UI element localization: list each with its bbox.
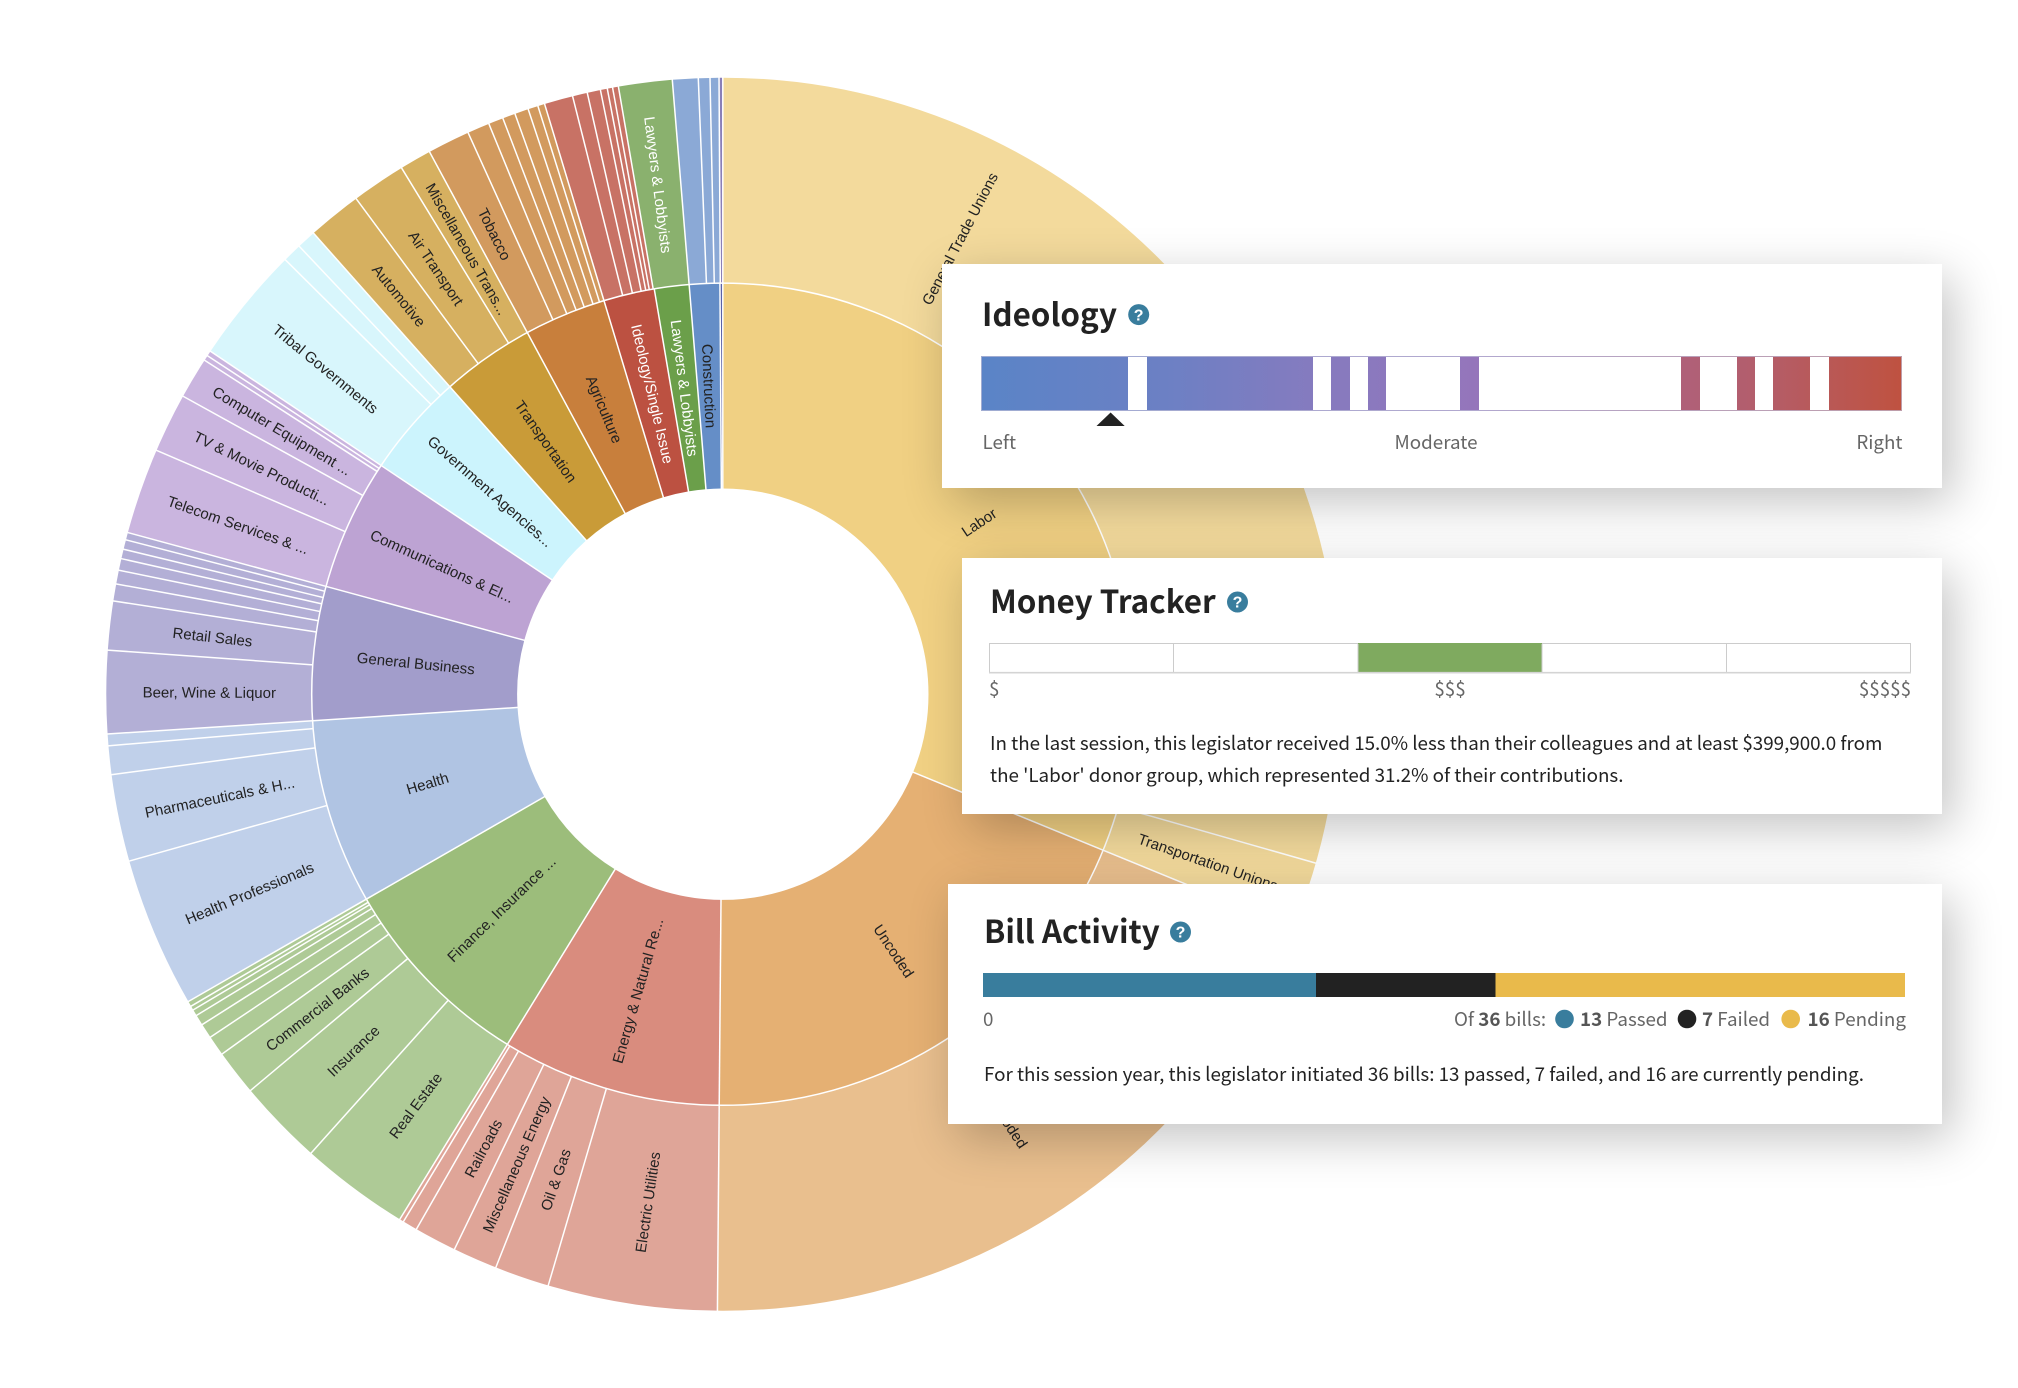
- label: Automotive: Automotive: [368, 262, 429, 331]
- label: Uncoded outer: Uncoded: [983, 1092, 1030, 1152]
- inner ring: donor sectors: [287, 259, 1158, 1130]
- label: Real Estate: Real Estate: [386, 1070, 446, 1142]
- label: Tobacco: Tobacco: [474, 206, 514, 263]
- label: Telecom Services: Telecom Services & ...: [165, 493, 311, 558]
- scale label: five dollars: $$$$$: [1859, 675, 1911, 702]
- label: Miscellaneous Energy: Miscellaneous Energy: [480, 1094, 555, 1235]
- money tracker scale: [989, 643, 1911, 673]
- outer ring labels: [143, 116, 1280, 1254]
- legend: bill counts: [1454, 1005, 1906, 1032]
- label: Railroads: Railroads: [462, 1117, 506, 1181]
- text block: money summary: In the last session, this legislator received 15.0% less than their colleagues and at least $399,900.0 from: [990, 729, 1882, 756]
- icon: help: ?: [1176, 925, 1185, 942]
- text block: money summary: the 'Labor' donor group, which represented 31.2% of their contributions.: [990, 761, 1623, 788]
- axis label: zero: 0: [983, 1005, 993, 1032]
- label: Beer, Wine and Liquor: Beer, Wine & Liquor: [143, 684, 276, 702]
- icon: help: [1170, 922, 1191, 942]
- label: Electric Utilities: Electric Utilities: [633, 1151, 664, 1254]
- scale label: one dollar: $: [989, 675, 999, 702]
- label: Commercial Banks: Commercial Banks: [263, 965, 373, 1055]
- panel: Money Tracker: [962, 558, 1942, 814]
- label: Tribal Governments: Tribal Governments: [269, 321, 381, 418]
- label: Pharmaceuticals: Pharmaceuticals & H...: [144, 775, 296, 822]
- heading: Money Tracker: Money Tracker: [990, 578, 1216, 623]
- label: Transportation Unions: Transportation Unions: [1136, 831, 1280, 895]
- axis label: Right: Right: [1856, 428, 1902, 455]
- label: Lawyers and Lobbyists inner: Lawyers & Lobbyists: [667, 319, 701, 458]
- label: Health Professionals: Health Professionals: [183, 859, 316, 928]
- label: Oil and Gas: Oil & Gas: [538, 1147, 575, 1213]
- outer ring: donor sub-sectors: [0, 0, 1448, 1388]
- label: Agriculture: Agriculture: [582, 373, 625, 446]
- legend: bill counts: Of 36 bills:: [1454, 1005, 1546, 1032]
- label: Health: Health: [404, 770, 451, 798]
- text block: money summary: [990, 729, 1882, 788]
- label: Ideology/Single Issue: Ideology/Single Issue: [627, 323, 676, 465]
- panel: Ideology: [942, 264, 1942, 488]
- heading: Ideology: Ideology: [982, 291, 1117, 336]
- icon: help: ?: [1134, 307, 1144, 324]
- label: Labor: Labor: [959, 505, 1000, 541]
- text block: bill summary: For this session year, this legislator initiated 36 bills: 13 passed, 7 failed, and 16 are currently pending.: [984, 1060, 1864, 1087]
- label: Retail Sales: Retail Sales: [172, 625, 253, 651]
- label: TV and Movie Production: TV & Movie Producti...: [191, 429, 332, 509]
- label: Insurance: Insurance: [324, 1022, 384, 1080]
- icon: help: ?: [1233, 595, 1242, 612]
- label: Lawyers and Lobbyists outer: Lawyers & Lobbyists: [640, 116, 674, 254]
- marker: ideology position: [1096, 412, 1125, 426]
- label: General Business: General Business: [356, 650, 476, 678]
- legend: bill counts: 7 Failed: [1702, 1005, 1770, 1032]
- label: Air Transport: Air Transport: [404, 228, 467, 310]
- stacked bar: bills: [983, 973, 1905, 997]
- label: Transportation: Transportation: [511, 398, 580, 486]
- axis label: Moderate: Moderate: [1395, 428, 1477, 455]
- label: Energy and Natural Resources: Energy & Natural Re...: [610, 916, 667, 1065]
- icon: help: [1128, 304, 1149, 325]
- label: Communications: Communications & El...: [367, 527, 516, 607]
- scale label: three dollars: $$$: [1434, 675, 1466, 702]
- label: Computer Equipment: Computer Equipment ...: [209, 384, 354, 479]
- label: Uncoded: Uncoded: [869, 922, 917, 981]
- label: Government Agencies: Government Agencies...: [424, 433, 556, 551]
- heading: Bill Activity: Bill Activity: [984, 908, 1160, 953]
- icon: help: [1227, 592, 1248, 612]
- legend: bill counts: 13 Passed: [1580, 1005, 1668, 1032]
- legend: bill counts: 16 Pending: [1808, 1005, 1906, 1032]
- inner ring labels: [356, 319, 1000, 1065]
- panel: Bill Activity: [948, 884, 1942, 1124]
- ideology spectrum bar: [981, 356, 1902, 411]
- label: Finance and Insurance: Finance, Insurance ...: [444, 853, 560, 966]
- label: Construction: Construction: [698, 344, 719, 428]
- label: Miscellaneous Transport: Miscellaneous Trans...: [422, 180, 511, 318]
- axis label: Left: Left: [982, 428, 1016, 455]
- label: General Trade Unions: General Trade Unions: [919, 170, 1002, 308]
